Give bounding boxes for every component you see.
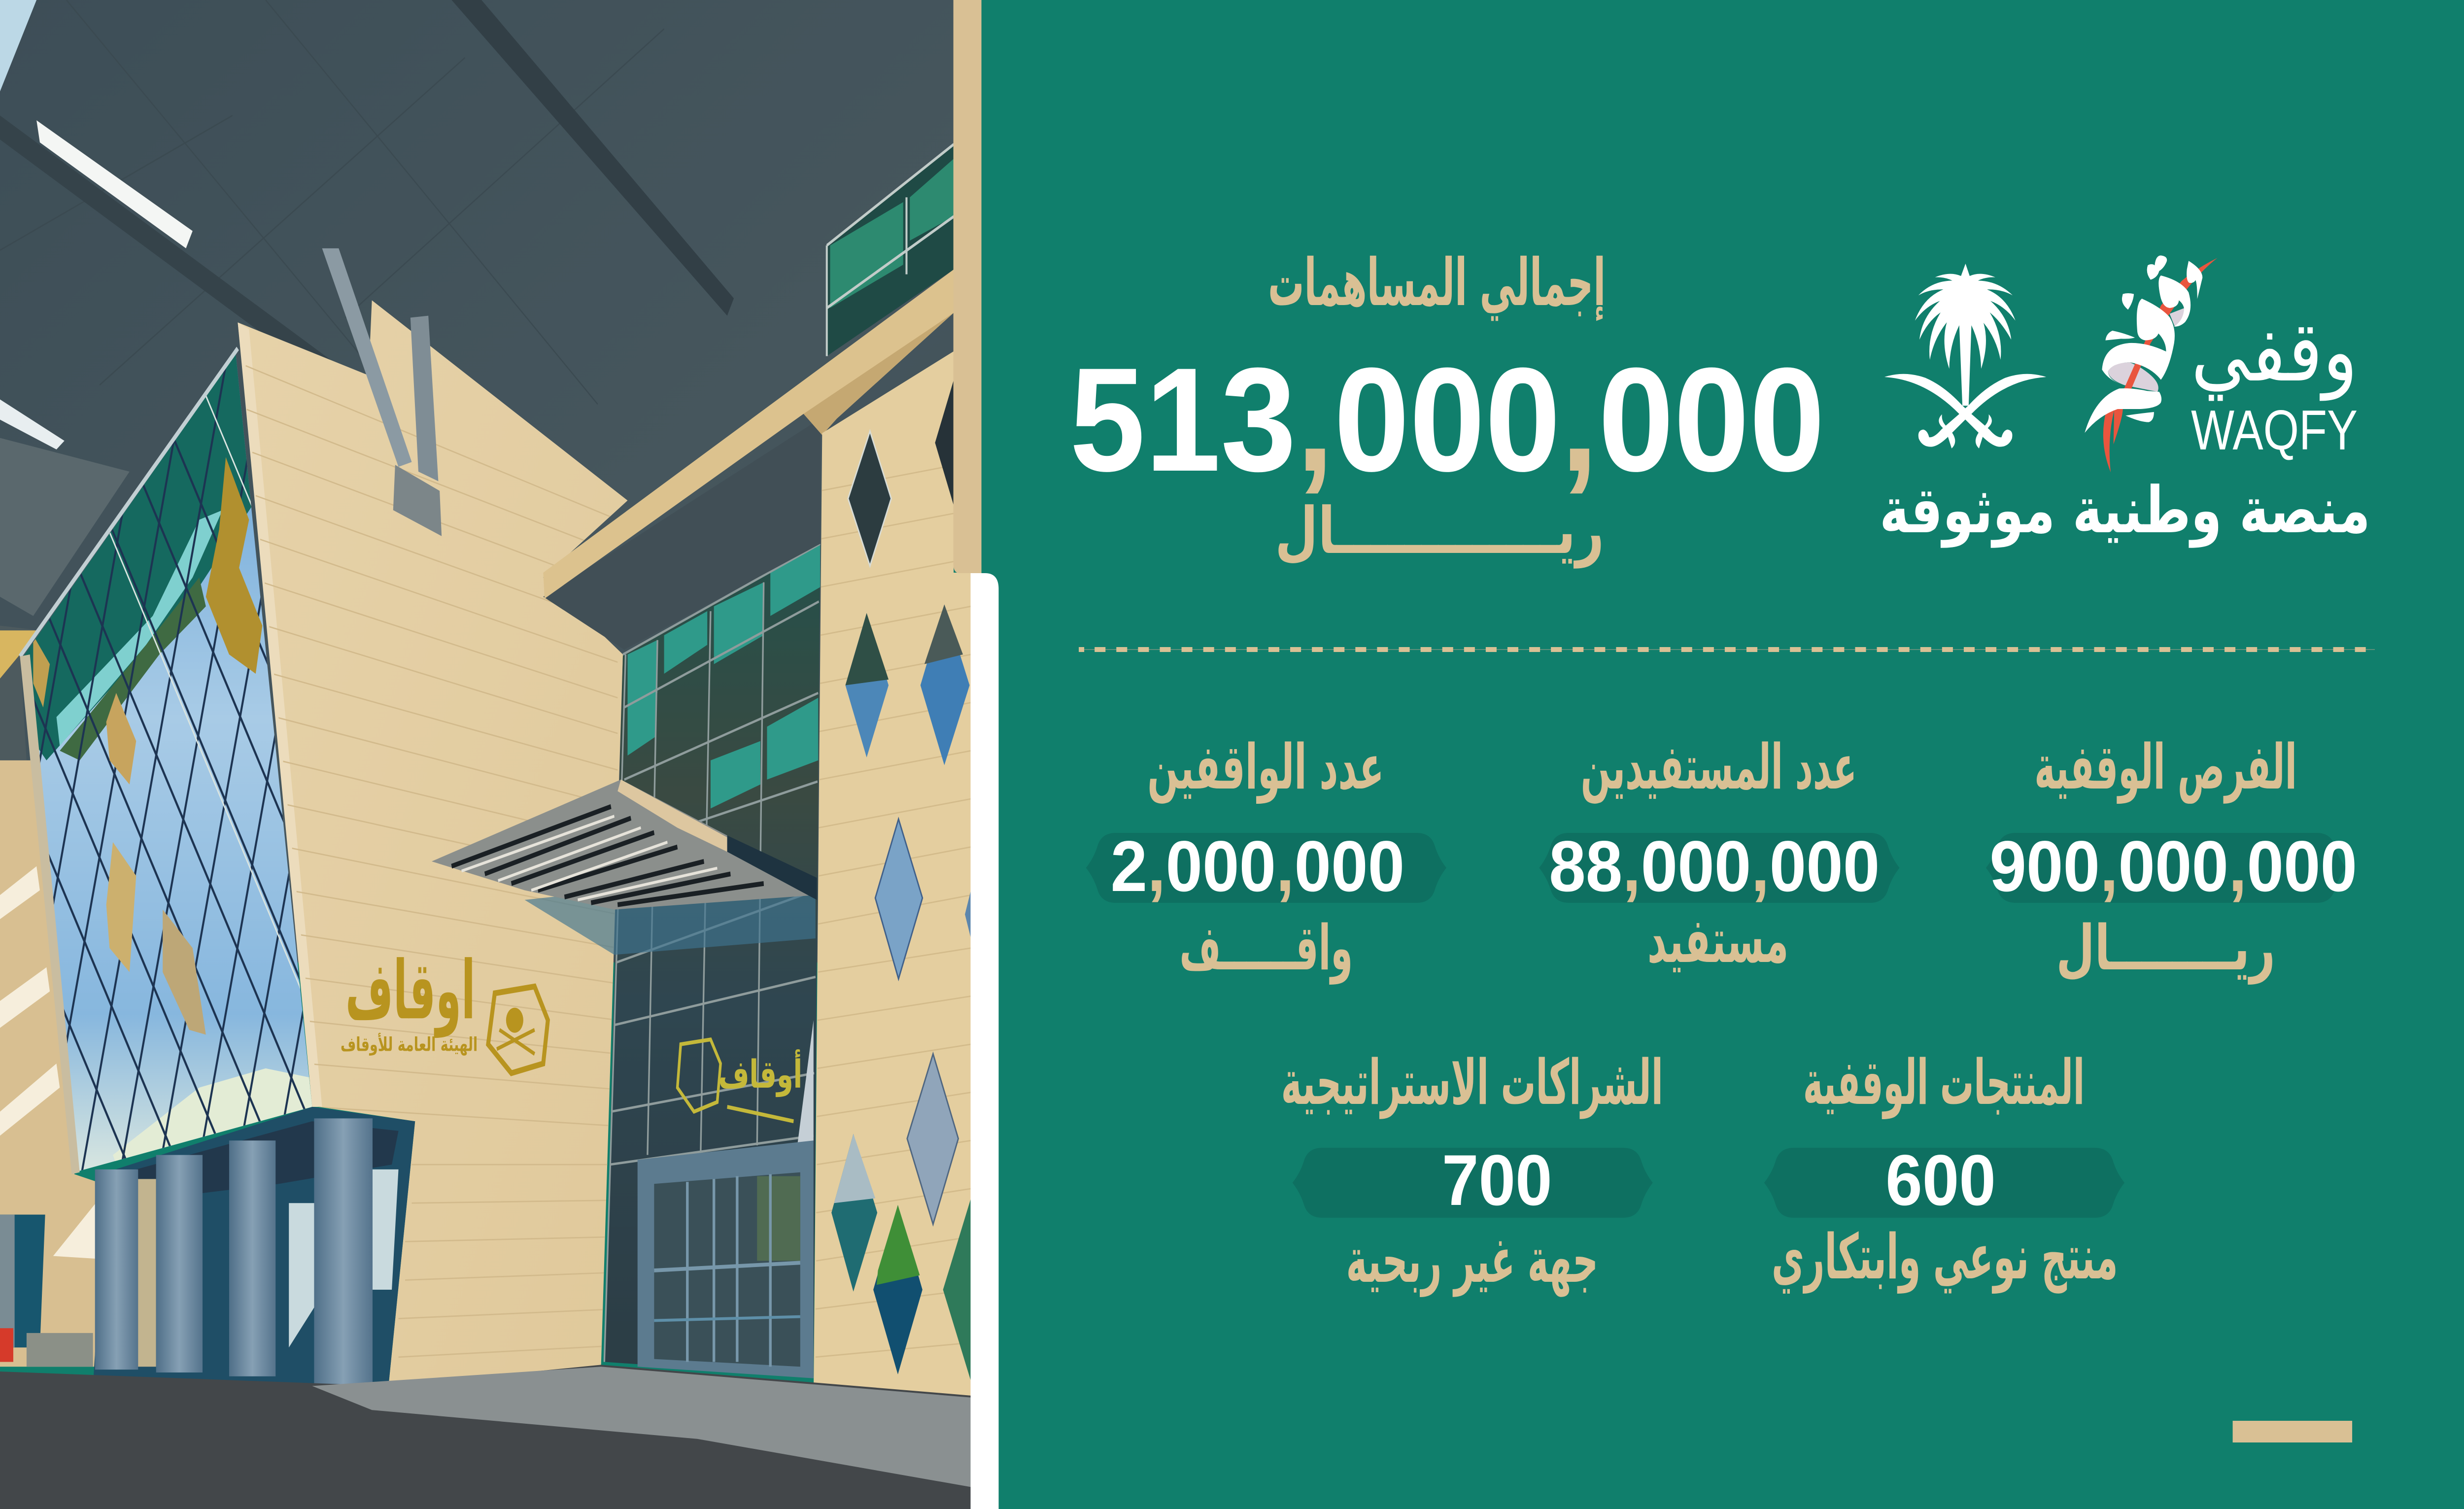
heading: total contributions: إجمالي المساهمات xyxy=(1268,244,1606,321)
heading: عدد المستفيدين xyxy=(1581,731,1857,804)
total contributions block xyxy=(1070,244,1825,568)
logo wordmark: Arabic: وقفي xyxy=(2191,303,2358,401)
heading: المنتجات الوقفية xyxy=(1803,1046,2085,1119)
heading: الشراكات الاستراتيجية xyxy=(1281,1046,1663,1119)
big number: 513,000,000 xyxy=(1070,337,1825,503)
value pill xyxy=(1293,1148,1653,1218)
photo: pavement xyxy=(0,1365,971,1509)
photo: upper stone wall and stepped beam xyxy=(20,248,627,1386)
photo: glazing sign: أوقاف xyxy=(719,1049,802,1097)
value: 700 xyxy=(1442,1140,1552,1220)
icon: crossed swords xyxy=(1884,374,2046,448)
photo: wall sign awqaf: الهيئة العامة للأوقاف xyxy=(341,1032,478,1056)
unit: riyal: ريـــــــــــــال xyxy=(1275,494,1604,568)
stat: strategic partnerships xyxy=(1281,1046,1663,1297)
unit: ريــــــــال xyxy=(2056,912,2275,985)
photo: canopy beam and soffit xyxy=(543,270,954,650)
photo: ground floor columns xyxy=(93,1107,415,1386)
unit: واقــــــف xyxy=(1179,912,1353,985)
value pill xyxy=(1764,1148,2124,1218)
gold corner bar xyxy=(2233,1421,2352,1442)
value: 900,000,000 xyxy=(1989,826,2357,906)
white vertical bar xyxy=(971,573,998,1509)
value pill xyxy=(1086,833,1446,903)
stat: endowers xyxy=(1086,731,1446,985)
stat: endowment products xyxy=(1764,1046,2124,1294)
heading: الفرص الوقفية xyxy=(2034,731,2297,804)
unit: مستفيد xyxy=(1647,904,1788,977)
stat: endowment opportunities xyxy=(1986,731,2357,985)
logo: Waqfy calligraphy xyxy=(2085,255,2218,472)
photo: glass canopy xyxy=(432,780,817,955)
photo: wall sign awqaf: اوقاف xyxy=(345,944,476,1038)
photo: background wall on left xyxy=(0,625,103,1367)
tagline: منصة وطنية موثوقة xyxy=(1880,473,2370,548)
icon: white calligraphic strokes xyxy=(2085,255,2202,433)
icon: lilac ribbon xyxy=(2108,308,2185,392)
value: 88,000,000 xyxy=(1549,826,1880,906)
icon: palm tree xyxy=(1915,264,2016,406)
value pill xyxy=(1986,833,2346,903)
logo wordmark: WAQFY: WAQFY xyxy=(2191,399,2358,462)
icon: red ribbon xyxy=(2103,258,2218,472)
panel: building photo xyxy=(0,0,971,1509)
photo: entrance glazing xyxy=(604,544,820,1378)
gold vertical bar xyxy=(954,0,982,573)
photo: ceiling canopy xyxy=(0,0,971,962)
photo: glazing sign xyxy=(678,1039,802,1121)
photo: wall sign awqaf xyxy=(341,944,548,1073)
heading: عدد الواقفين xyxy=(1147,731,1384,804)
photo: glass facade with lattice xyxy=(0,0,423,1251)
dashed divider xyxy=(1079,647,2375,652)
photo: glass frame top edge xyxy=(20,348,238,656)
photo: stone column with diamond windows xyxy=(814,351,971,1401)
unit: جهة غير ربحية xyxy=(1346,1224,1598,1297)
value: 600 xyxy=(1885,1140,1996,1220)
stat: beneficiaries xyxy=(1539,731,1899,977)
logo: Saudi emblem xyxy=(1884,264,2046,448)
unit: منتج نوعي وابتكاري xyxy=(1772,1221,2118,1294)
value pill xyxy=(1539,833,1899,903)
value: 2,000,000 xyxy=(1111,826,1404,906)
